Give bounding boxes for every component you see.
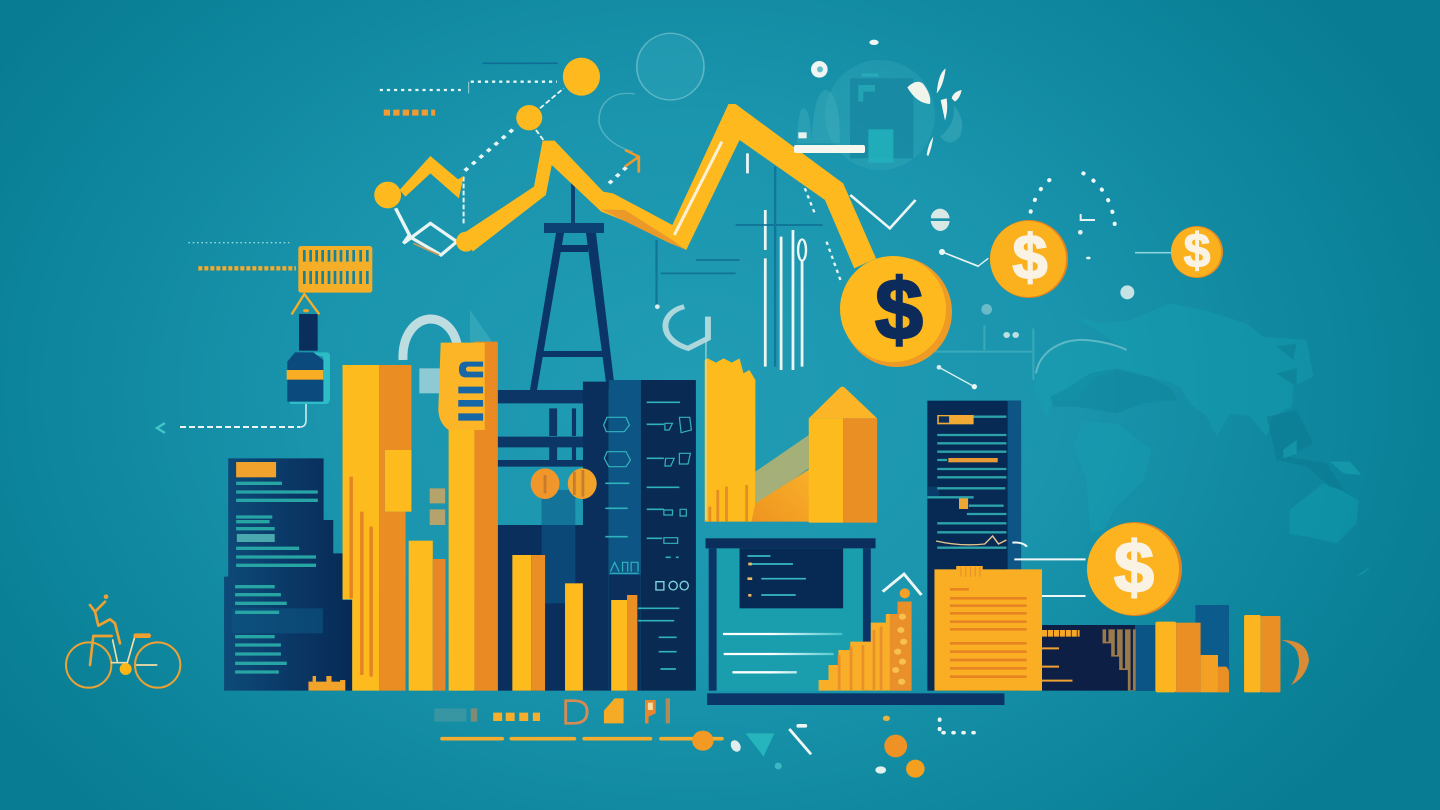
tan blocks — [430, 488, 445, 525]
dotted white line — [188, 241, 289, 245]
small white — [798, 132, 807, 138]
bottom marks — [434, 698, 980, 778]
map: South America — [1073, 422, 1152, 533]
base — [707, 693, 1004, 705]
small bar B — [565, 583, 583, 691]
shadow smudge — [601, 209, 685, 249]
faded blocks — [434, 708, 466, 722]
map: New Guinea — [1283, 440, 1372, 577]
yellow squares — [493, 713, 540, 721]
bar 2 yellow — [449, 407, 474, 691]
label box — [939, 416, 949, 423]
corner — [468, 82, 470, 93]
dark block — [1042, 625, 1155, 691]
coin rim — [1088, 522, 1182, 616]
derrick pole — [571, 182, 575, 224]
dark mid building — [498, 525, 584, 691]
tower lines — [605, 402, 680, 669]
connector end — [972, 384, 977, 389]
dot pair — [1003, 332, 1019, 338]
coin face — [840, 256, 946, 362]
dark block dashes — [1042, 648, 1072, 681]
bike wheels — [66, 642, 180, 688]
pale block — [237, 534, 275, 542]
tab marks — [961, 567, 980, 577]
small bar B side — [583, 583, 597, 691]
right bar orange — [1176, 623, 1201, 692]
right bar short 2 — [1218, 667, 1229, 692]
grid panel — [298, 246, 372, 293]
house orange — [843, 418, 877, 523]
padlock arc — [403, 319, 458, 360]
dot 2 — [516, 105, 542, 130]
dotted connector 2 — [465, 128, 629, 183]
stairs dots — [896, 617, 904, 682]
connector start — [937, 365, 941, 370]
rider — [90, 602, 120, 665]
coin: top right — [1171, 225, 1223, 278]
map: dark Americas shadow — [1050, 368, 1177, 413]
dark right — [641, 380, 696, 691]
small building — [604, 698, 624, 723]
white speck — [648, 703, 653, 710]
house yellow — [809, 418, 843, 523]
globe bubble — [825, 60, 935, 170]
dark block orange — [1042, 623, 1080, 643]
stairs column — [890, 602, 912, 691]
bottle band — [287, 370, 323, 380]
stairs — [819, 602, 912, 691]
bar 2 head — [438, 343, 485, 430]
white arc — [1012, 542, 1027, 547]
map: Eurasia — [1033, 303, 1313, 437]
small marks — [1081, 214, 1095, 220]
ghost bubble ring — [637, 33, 704, 100]
orange dot — [692, 731, 714, 751]
tower stripe — [1008, 401, 1021, 571]
dot 3 — [374, 182, 401, 208]
table screen area — [717, 548, 863, 691]
last bar yellow — [1244, 615, 1261, 692]
white dots — [805, 188, 840, 280]
connector dot — [939, 249, 945, 255]
tower lines — [927, 417, 1006, 548]
tower small circles — [656, 581, 688, 590]
screen lines — [747, 556, 806, 595]
derrick cap — [544, 223, 604, 233]
dot 4 — [456, 232, 476, 252]
tan lines — [1107, 629, 1132, 690]
small bar A side — [531, 555, 545, 691]
ramp — [751, 468, 811, 522]
dollar sign: $ — [1184, 225, 1211, 278]
coin: lower right — [1087, 522, 1182, 616]
document lines — [950, 589, 1027, 677]
tower label — [937, 415, 974, 424]
orange circle 2 — [906, 760, 925, 778]
bar 1b yellow — [409, 541, 433, 691]
tower icons — [604, 417, 691, 573]
blue letter C — [459, 362, 483, 377]
stairs lines — [839, 627, 881, 690]
table legs — [709, 548, 871, 691]
ramp top texture — [755, 435, 809, 507]
stock line chart with dots — [374, 33, 876, 268]
clipboard label with dotted lines — [188, 243, 372, 404]
capsule loops — [798, 239, 806, 261]
bar 1 light — [385, 450, 411, 512]
pin head — [939, 249, 945, 254]
orange circles — [531, 468, 597, 499]
coin rim — [842, 257, 952, 367]
dots — [374, 58, 600, 252]
document — [934, 569, 1042, 691]
connector line — [942, 252, 988, 266]
white dash — [796, 724, 807, 728]
dollar sign: $ — [875, 262, 923, 358]
coin rim — [1171, 226, 1223, 278]
speck — [869, 40, 879, 45]
dollar sign: $ — [1114, 528, 1154, 608]
white pebble — [729, 739, 743, 753]
left city buildings — [224, 342, 696, 691]
gold lines — [442, 733, 722, 744]
jag thin lines — [710, 485, 747, 522]
blue tower — [1195, 605, 1229, 691]
right tower — [927, 401, 1021, 691]
coin face — [990, 221, 1066, 297]
bar 1 yellow — [343, 365, 379, 691]
city block dark — [850, 78, 913, 158]
jagged bar — [705, 358, 755, 522]
teal dot — [775, 763, 782, 769]
white splash — [907, 82, 930, 104]
small gold — [883, 716, 890, 721]
stripe — [929, 217, 951, 220]
stepped tan — [1103, 629, 1136, 691]
teal triangle — [746, 733, 774, 757]
oil derrick — [530, 182, 615, 390]
dark vertical lines — [657, 167, 823, 367]
white splash — [419, 368, 441, 393]
bike hub — [120, 663, 132, 675]
bar 1 thin lines — [351, 477, 371, 677]
dark tower left — [583, 382, 609, 691]
striped ball — [931, 209, 950, 230]
bike frame — [112, 636, 157, 665]
dot — [1078, 230, 1083, 235]
bike handlebar — [136, 629, 149, 643]
connector — [300, 404, 306, 427]
right bar yellow — [1156, 622, 1176, 692]
dot — [1086, 257, 1091, 259]
orange circle 1 — [884, 735, 907, 757]
central and right city buildings — [705, 340, 1309, 705]
hanger — [292, 294, 319, 314]
bar 1 orange — [379, 365, 411, 691]
white sparks — [927, 68, 962, 156]
vertical white lines — [747, 153, 802, 370]
bicycle — [66, 594, 180, 688]
white instruments under the chart — [655, 153, 979, 370]
top lines — [483, 61, 558, 66]
city block accent — [858, 73, 878, 102]
tower lower blue — [927, 487, 939, 497]
map: Australia — [1289, 483, 1358, 543]
rider head — [104, 594, 108, 599]
screen bullets — [747, 564, 752, 595]
laptop screen — [740, 548, 843, 608]
dot 1 — [563, 58, 600, 96]
faint streaks — [470, 310, 498, 385]
letter D — [566, 701, 587, 723]
dollar sign: $ — [1012, 223, 1048, 293]
orange dashes — [384, 104, 435, 122]
small bar C side — [627, 595, 637, 691]
tan segment — [413, 243, 439, 255]
dot — [655, 304, 660, 309]
grid slots — [304, 250, 367, 284]
white bar — [794, 145, 865, 153]
small ring — [811, 61, 828, 78]
orange dot — [900, 588, 910, 598]
dashed line — [180, 426, 300, 428]
dotted orange line — [198, 262, 296, 275]
house roof — [809, 387, 877, 418]
bottle neck — [299, 314, 318, 351]
tower orange line — [948, 458, 998, 462]
connector lines — [1014, 559, 1086, 596]
jag white edge — [704, 340, 708, 520]
tower chart — [936, 536, 1006, 545]
left arrow and dashed connector — [157, 404, 306, 433]
table glow lines — [723, 634, 842, 672]
derrick crossbars — [537, 245, 607, 357]
glass globe with city — [794, 40, 962, 170]
striped ball — [931, 209, 950, 231]
white dot — [875, 766, 886, 774]
blue bars — [458, 387, 483, 421]
white diamond — [396, 208, 457, 255]
faint arc — [599, 93, 635, 152]
right ghost shape — [940, 105, 962, 142]
line highlight — [674, 142, 722, 235]
coin rim — [990, 220, 1068, 298]
small bar C — [611, 600, 627, 691]
right bar short — [1201, 655, 1218, 692]
crenellated small base — [308, 676, 345, 691]
left ghost — [797, 90, 840, 143]
dotted white lines — [380, 82, 557, 90]
circle 1 — [531, 468, 560, 499]
world map — [1033, 303, 1372, 577]
small bar A — [512, 555, 531, 691]
dark lower — [609, 575, 641, 691]
map: outline arc — [1036, 340, 1127, 373]
bottle body — [287, 352, 323, 402]
last bar orange — [1261, 616, 1280, 692]
dot — [1120, 285, 1134, 299]
lattice bars — [498, 390, 584, 467]
dots group — [981, 230, 1134, 338]
dotted arc — [1031, 173, 1115, 227]
C shape — [665, 307, 708, 348]
white dots — [940, 719, 980, 738]
tower orange small — [959, 498, 968, 509]
chevron — [883, 574, 921, 595]
orange flag — [645, 700, 656, 723]
teal text lines — [235, 483, 318, 672]
small zigzag line — [400, 156, 464, 198]
dot — [981, 304, 992, 315]
coin face — [1087, 523, 1179, 615]
circle 2 — [568, 468, 597, 499]
main line — [466, 104, 876, 268]
dotted connectors — [464, 88, 564, 223]
line to coin 3 — [1135, 250, 1172, 255]
document tab — [956, 566, 983, 577]
bottle glow — [290, 352, 330, 404]
orange faded — [471, 708, 477, 722]
orange label — [236, 462, 276, 477]
mid band — [232, 608, 323, 633]
faint lines — [930, 325, 1033, 380]
bar 1b orange — [433, 559, 446, 691]
orange bar — [666, 698, 670, 723]
derrick legs — [530, 233, 615, 390]
orange dot — [303, 309, 309, 312]
ring center — [817, 66, 823, 72]
connector line 2 — [939, 367, 974, 387]
stripe — [930, 218, 951, 221]
coin: top middle — [990, 220, 1068, 298]
handle — [1281, 640, 1309, 685]
blue stripe — [609, 380, 641, 575]
small arrow — [625, 150, 639, 173]
white strokes — [789, 729, 811, 754]
mid building lighter zone — [542, 490, 575, 603]
checkmark — [850, 195, 916, 228]
coin: big navy dollar — [840, 256, 952, 367]
bar 2 orange — [474, 342, 498, 691]
dark building — [224, 458, 352, 691]
right network marks and dotted arc — [930, 173, 1172, 389]
arrow — [157, 423, 165, 433]
map: Pacific islands — [1267, 343, 1343, 490]
coin face — [1171, 227, 1221, 277]
pin line — [941, 252, 979, 267]
city block light — [868, 129, 893, 163]
table top — [706, 538, 876, 548]
dark block blue — [1135, 625, 1155, 691]
circle stripes — [545, 470, 583, 497]
